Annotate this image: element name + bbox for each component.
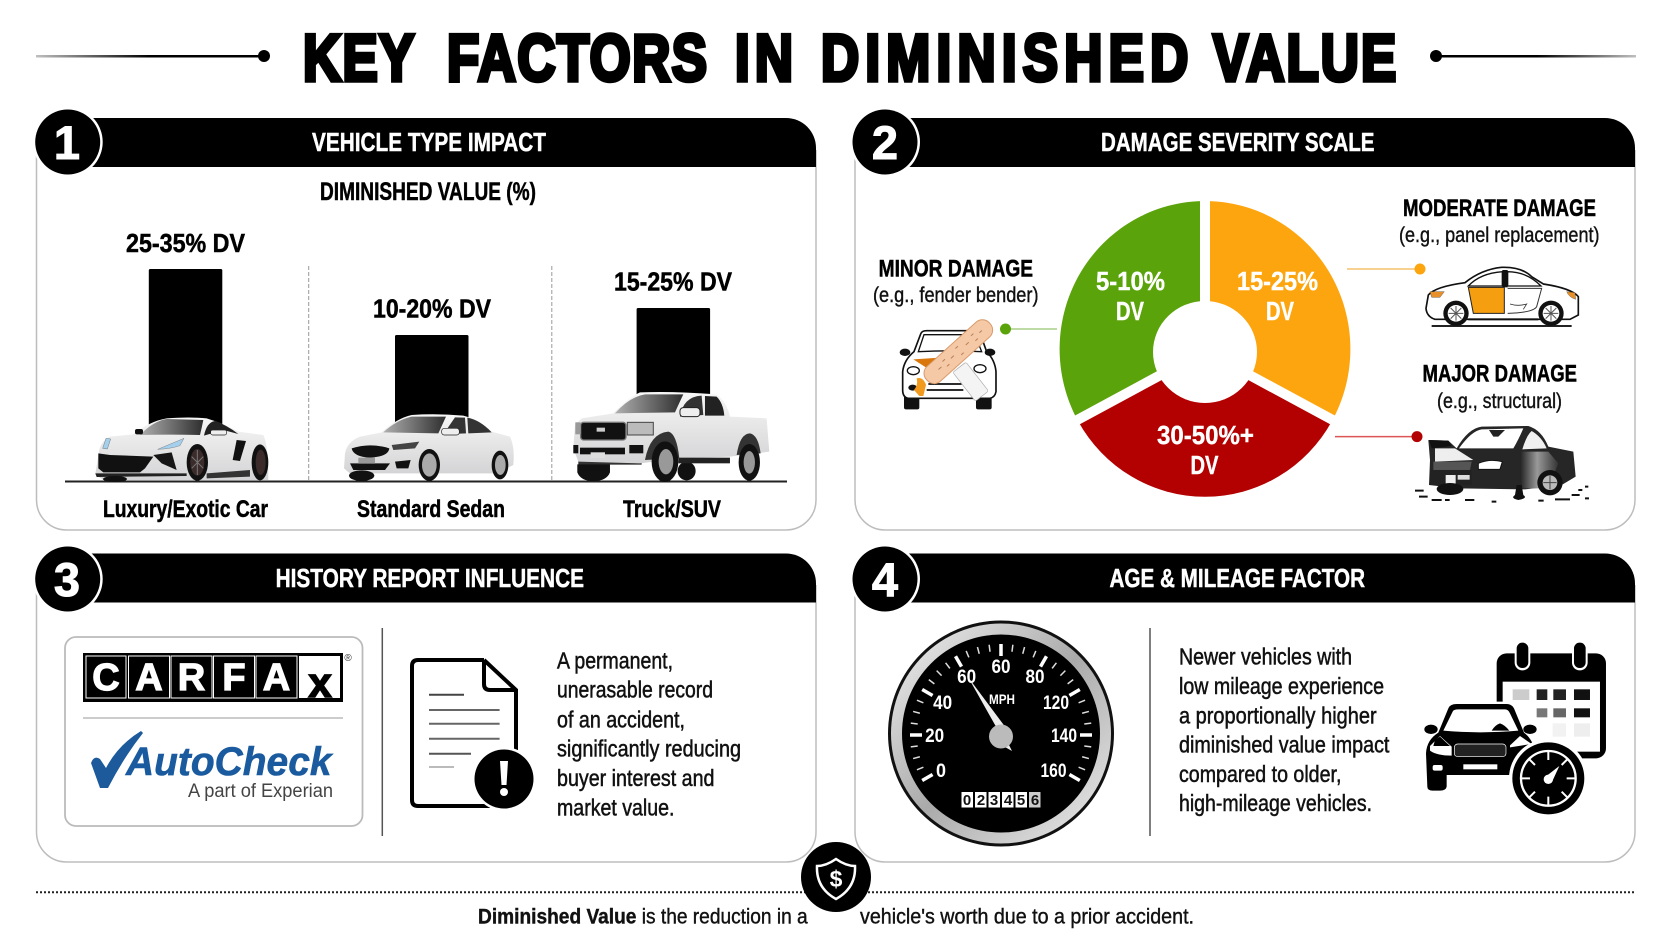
dial numbers: 120 (1043, 693, 1069, 714)
panel: vehicle type impact (33, 107, 816, 530)
logo box (65, 637, 362, 826)
callout: moderate damage (1347, 195, 1600, 274)
callout: moderate damage: (e.g., panel replacement) (1399, 224, 1600, 247)
logo: carfax: A (263, 657, 290, 699)
title: IN (735, 21, 793, 95)
bar: sedan (395, 335, 468, 430)
text block: history report: buyer interest and (557, 765, 714, 791)
value: sedan: 10-20% DV (373, 294, 492, 324)
icon: document with alert (412, 660, 536, 811)
title (36, 21, 1636, 95)
title: VALUE (1213, 21, 1396, 95)
text block: history report: significantly reducing (557, 736, 741, 762)
callout: major damage: (e.g., structural) (1437, 390, 1562, 413)
icon: sedan (344, 414, 514, 481)
logo: carfax: A (135, 657, 163, 699)
title: FACTORS (447, 21, 707, 95)
odometer: 6 (1031, 792, 1039, 809)
major ticks (910, 644, 1092, 780)
logo: carfax: F (222, 657, 246, 699)
value: major: 30-50%+ (1157, 420, 1254, 450)
dial numbers: 160 (1040, 761, 1066, 782)
logo: carfax: C (92, 657, 120, 699)
callout: minor damage: MINOR DAMAGE (879, 256, 1033, 282)
text block: age and mileage: high-mileage vehicles. (1179, 790, 1372, 816)
logo: autocheck: A part of Experian (188, 781, 333, 802)
segment: moderate orange (1205, 201, 1350, 421)
odometer: 0 (963, 792, 971, 809)
icon: luxury car (95, 417, 268, 482)
callout: major damage: MAJOR DAMAGE (1422, 360, 1577, 388)
badge 4 (850, 544, 920, 614)
dial numbers: 40 (933, 693, 952, 714)
panel 1 header bar (80, 118, 816, 167)
chart title: DIMINISHED VALUE (%) (320, 178, 536, 206)
value: luxury: 25-35% DV (126, 228, 246, 258)
logo: carfax: x (308, 659, 332, 706)
donut chart (1060, 190, 1350, 497)
dial numbers: 0 (936, 761, 946, 782)
odometer: 4 (1004, 792, 1013, 809)
speedometer (888, 620, 1114, 846)
badge 2 (850, 107, 920, 177)
text block: age and mileage: diminished value impact (1179, 732, 1390, 758)
panel 2 header bar (898, 118, 1635, 167)
badge 2: 2 (872, 116, 898, 169)
badge 3: 3 (54, 553, 80, 606)
icon: moderate damage car (1426, 267, 1578, 326)
logo: carfax: R (178, 657, 205, 699)
gauge (1509, 739, 1588, 818)
donut chart: DV (1116, 296, 1145, 326)
badge 1: 1 (54, 116, 80, 169)
donut chart: DV (1190, 450, 1219, 480)
dial numbers: 80 (1026, 667, 1044, 688)
panel 3 header bar (80, 554, 816, 602)
dial numbers: 140 (1051, 726, 1077, 747)
panel: history report influence (33, 544, 816, 862)
badge 1 (33, 107, 103, 177)
icon: shield badge: $ (830, 866, 843, 892)
bar: luxury (149, 269, 222, 430)
logo: carfax (83, 653, 352, 706)
callout: minor damage: (e.g., fender bender) (873, 284, 1038, 307)
label: sedan: Standard Sedan (357, 496, 505, 523)
callout: moderate damage: MODERATE DAMAGE (1403, 195, 1596, 222)
icon: calendar, car and gauge (1424, 641, 1606, 818)
callout: minor damage (873, 256, 1057, 334)
bandage (920, 316, 996, 387)
dial numbers: 60 (957, 667, 976, 688)
panel 1 heading: VEHICLE TYPE IMPACT (312, 127, 546, 157)
icon: major damage car (1415, 426, 1589, 502)
icon: minor damage car with bandage (900, 316, 996, 409)
text block: age and mileage: low mileage experience (1179, 673, 1384, 699)
odometer: 2 (977, 792, 985, 809)
value: minor: 5-10% (1096, 266, 1165, 296)
footer (36, 842, 1636, 928)
dial numbers: 60 (992, 657, 1010, 678)
odometer (962, 792, 1040, 809)
panel 4 heading: AGE & MILEAGE FACTOR (1110, 563, 1365, 593)
icon: shield badge (801, 842, 871, 912)
text block: history report: of an accident, (557, 706, 685, 732)
panel 2 heading: DAMAGE SEVERITY SCALE (1101, 127, 1374, 157)
needle (968, 677, 1006, 732)
segment: major red (1078, 349, 1332, 497)
panel: age and mileage factor (850, 544, 1635, 862)
label: truck: Truck/SUV (623, 496, 721, 523)
panel 4 header bar (898, 554, 1635, 602)
panel: damage severity scale (850, 107, 1635, 530)
callout: major damage (1335, 360, 1577, 442)
dial numbers: MPH (989, 691, 1015, 707)
text block: age and mileage: Newer vehicles with (1179, 643, 1352, 669)
segment: minor green (1060, 201, 1205, 421)
text block: age and mileage: compared to older, (1179, 761, 1341, 787)
text block: history report (557, 647, 741, 820)
text block: age and mileage: a proportionally higher (1179, 702, 1377, 728)
logo: carfax: ® (344, 653, 352, 664)
odometer: 5 (1017, 792, 1025, 809)
calendar (1497, 641, 1606, 758)
donut chart: DV (1266, 296, 1295, 326)
white bandage strip (953, 362, 989, 401)
dial numbers: 20 (925, 726, 944, 747)
title: KEY (303, 21, 414, 95)
badge 4: 4 (872, 553, 898, 606)
dial numbers (925, 657, 1077, 782)
label: luxury: Luxury/Exotic Car (103, 496, 268, 523)
icon: truck (573, 392, 769, 482)
text block: history report: market value. (557, 794, 674, 820)
logo: autocheck (91, 731, 333, 802)
text block: age and mileage (1179, 643, 1390, 816)
panel 3 heading: HISTORY REPORT INFLUENCE (276, 563, 584, 593)
car front (1424, 704, 1537, 791)
footer text left: Diminished Value is the reduction in a (478, 905, 808, 928)
text block: history report: A permanent, (557, 647, 673, 673)
text block: history report: unerasable record (557, 677, 713, 703)
title: DIMINISHED (821, 21, 1188, 95)
footer text right: vehicle's worth due to a prior accident. (860, 905, 1194, 928)
odometer: 3 (990, 792, 998, 809)
value: moderate: 15-25% (1237, 266, 1318, 296)
bar: truck (637, 308, 710, 403)
bar chart (65, 228, 787, 482)
logo: autocheck: AutoCheck (125, 740, 333, 784)
badge 3 (33, 544, 103, 614)
value: truck: 15-25% DV (614, 266, 733, 296)
